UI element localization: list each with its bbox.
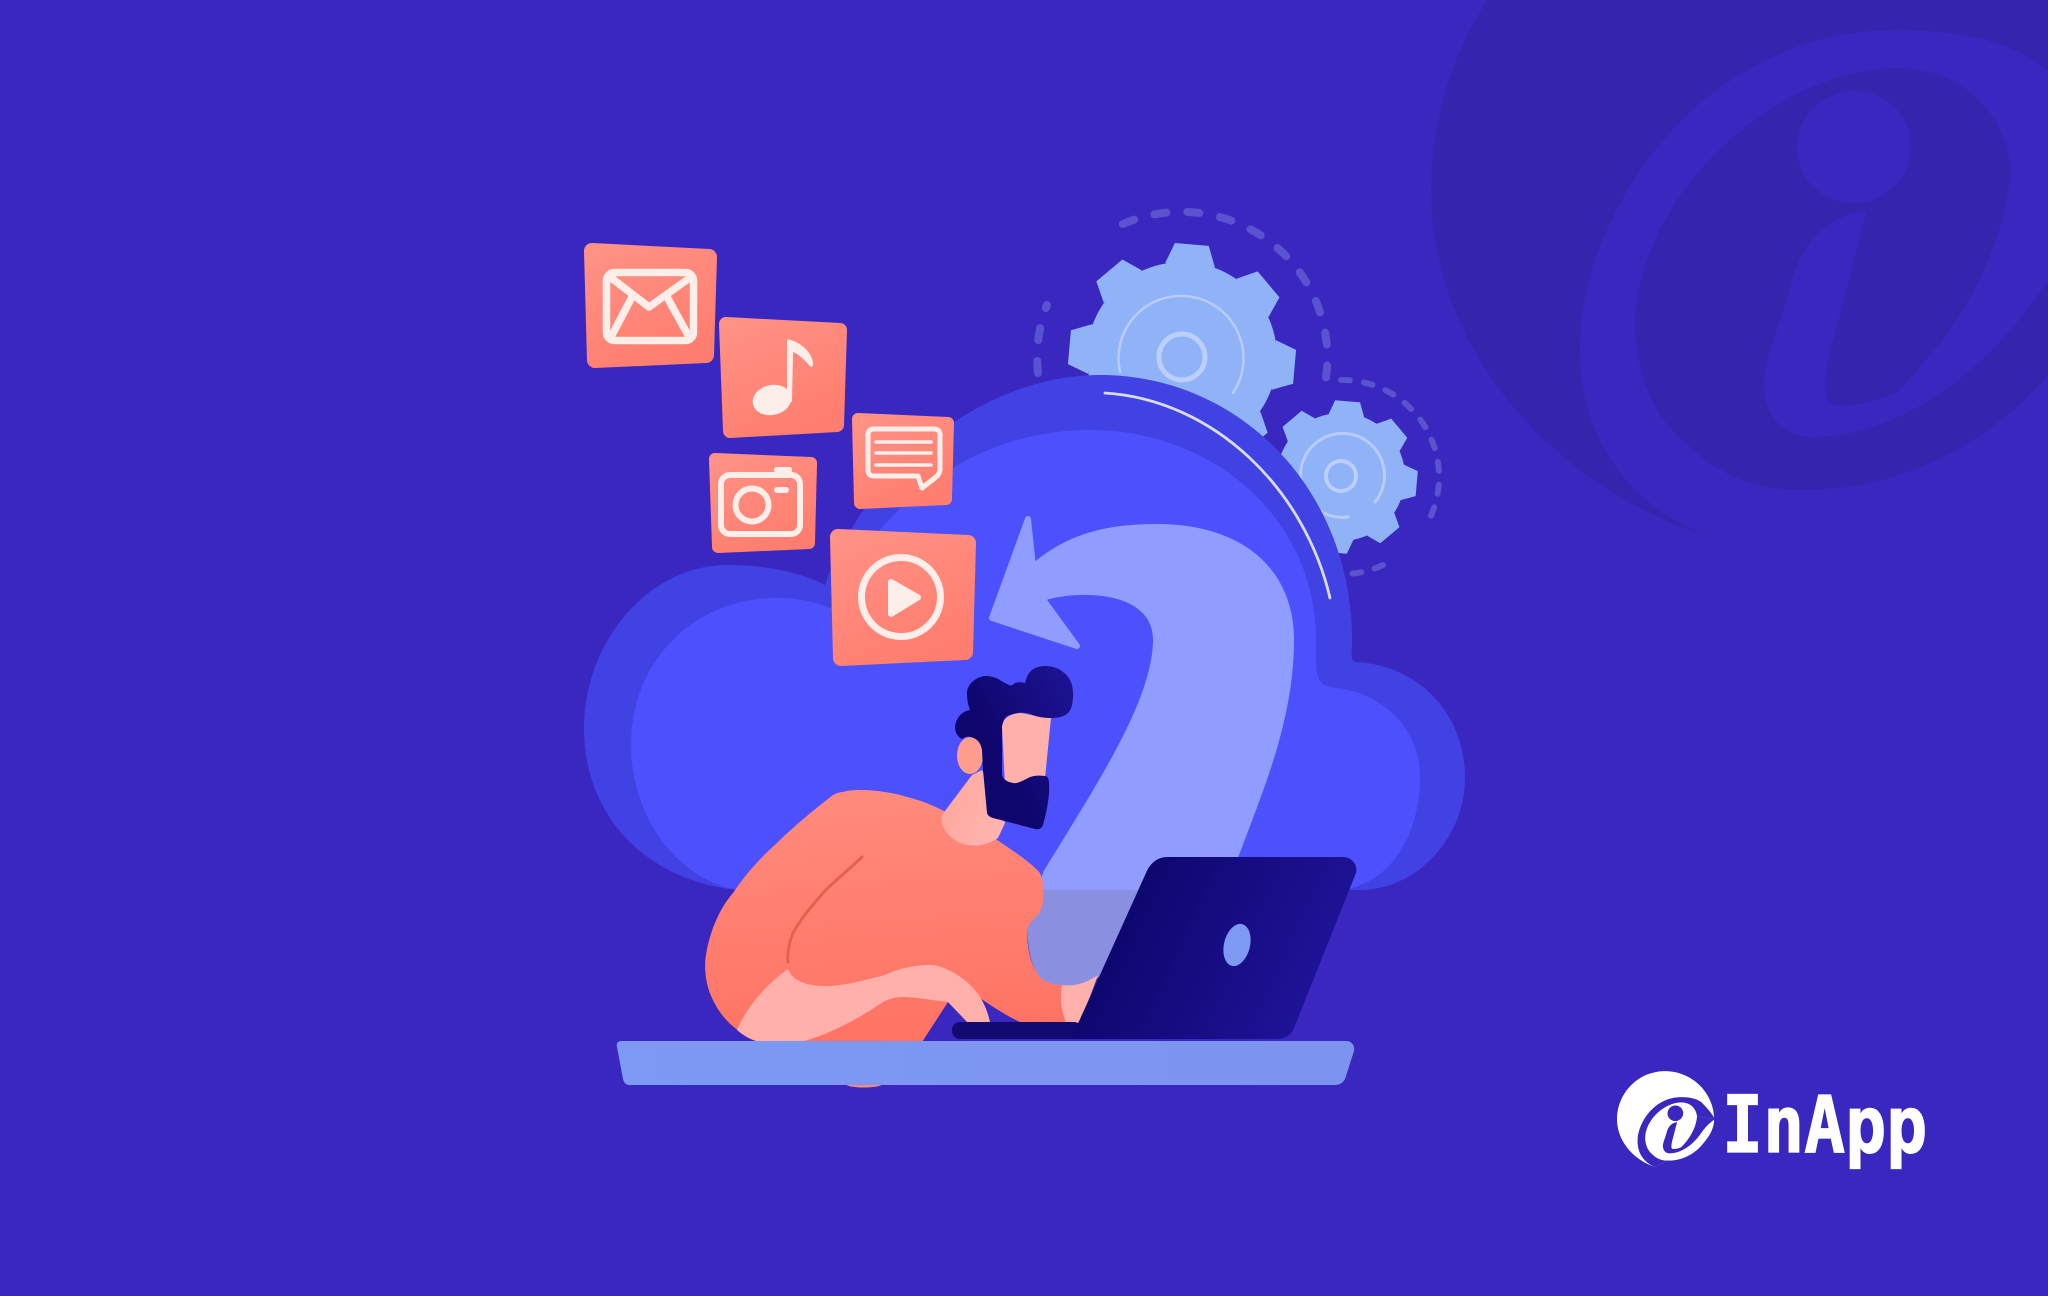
small gear xyxy=(1264,400,1418,554)
InApp logo xyxy=(1617,1071,1927,1171)
person at laptop xyxy=(705,666,1098,1042)
app icons xyxy=(592,251,968,658)
watermark: InApp emblem xyxy=(1431,0,2048,536)
right forearm xyxy=(1061,975,1098,1024)
laptop xyxy=(952,857,1356,1039)
neck xyxy=(942,770,1005,846)
large gear xyxy=(1067,242,1297,472)
hair and beard xyxy=(955,666,1073,829)
shirt peek under table xyxy=(846,1080,882,1088)
shirt xyxy=(705,790,1070,1042)
table xyxy=(617,1041,1354,1085)
laptop logo xyxy=(1219,921,1255,969)
arm and leg xyxy=(737,965,990,1042)
icon: play tile xyxy=(838,537,968,658)
dashed rotation arcs around gears xyxy=(1037,212,1439,574)
logo emblem xyxy=(1617,1071,1715,1167)
laptop base xyxy=(952,1022,1082,1039)
laptop lid xyxy=(1071,857,1356,1039)
icon: camera tile xyxy=(715,459,811,547)
icon: chat tile xyxy=(858,419,948,503)
back seam line xyxy=(788,857,862,962)
logo wordmark: InApp xyxy=(1722,1081,1927,1171)
icon: music tile xyxy=(726,324,840,431)
curved sync arrow xyxy=(992,519,1291,985)
cloud xyxy=(584,375,1465,890)
face xyxy=(1002,713,1051,785)
icon: mail tile xyxy=(592,251,709,360)
ear xyxy=(957,737,983,774)
